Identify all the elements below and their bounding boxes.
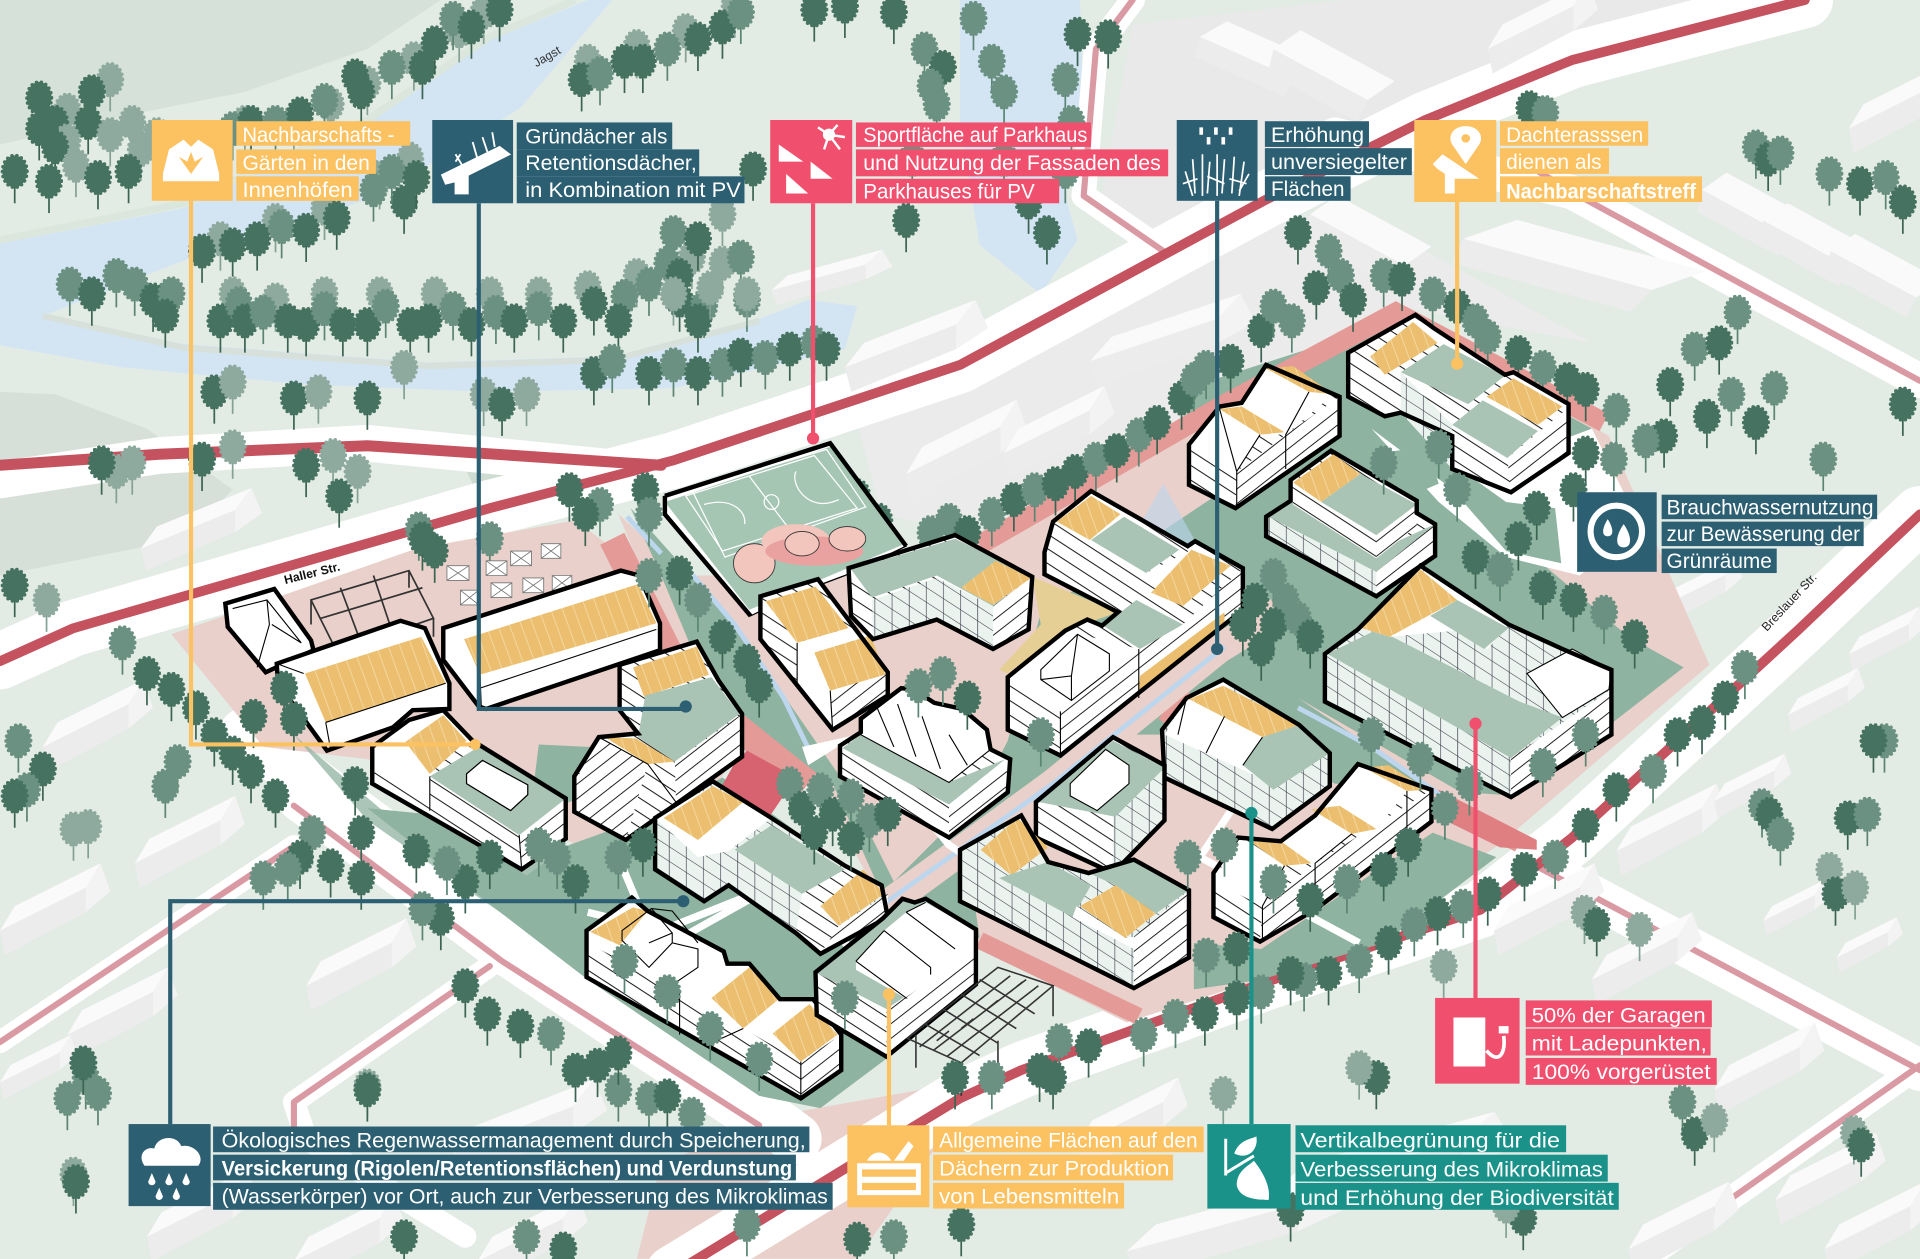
icon: charging station bbox=[1453, 1018, 1485, 1067]
callout: Sportflaeche bbox=[770, 120, 1168, 203]
icon: neighbours around plant bbox=[163, 140, 219, 181]
building: gabled L block bbox=[574, 642, 742, 840]
callout: Dachterrassen: Nachbarschaftstreff bbox=[1506, 179, 1697, 203]
callout: Vertikalbegruenung: Vertikalbegrünung für die bbox=[1300, 1128, 1560, 1152]
building: triple gables bbox=[1213, 764, 1431, 942]
river Jagst bbox=[0, 0, 1082, 392]
callout: Garagen Ladepunkte: 50% der Garagen bbox=[1532, 1003, 1706, 1027]
callout: Lebensmittelproduktion: Dächern zur Produktion bbox=[939, 1156, 1169, 1180]
pergola west bbox=[311, 571, 433, 667]
callout: Regenwassermanagement: Versickerung (Rigolen/Retentionsflächen) und Verdunstung bbox=[222, 1156, 792, 1180]
building: NE twin gable bbox=[1189, 365, 1340, 508]
icon: water circle bbox=[1591, 506, 1642, 557]
building: long solar hall centre bbox=[443, 571, 660, 709]
callout: Regenwassermanagement: Ökologisches Regenwassermanagement durch Speicherung, bbox=[222, 1128, 806, 1152]
building: square green roof bbox=[1036, 737, 1164, 873]
building: south terrace bbox=[655, 781, 888, 954]
icon: rain cloud bbox=[142, 1138, 201, 1166]
building: solar block west bbox=[760, 579, 888, 730]
trees behind project bbox=[2, 0, 1915, 632]
callout: Dachterrassen bbox=[1414, 120, 1702, 203]
icon: green roof bbox=[442, 132, 509, 193]
callout: Erhoehung unversiegelter Flaechen: Flächen bbox=[1271, 177, 1344, 201]
building: stepped roof block bbox=[840, 688, 1010, 838]
callout: Vertikalbegruenung: Verbesserung des Mikroklimas bbox=[1300, 1158, 1603, 1182]
site ground bbox=[171, 312, 1709, 1108]
building: south block glass bbox=[960, 815, 1189, 988]
callout: Regenwassermanagement bbox=[129, 1124, 833, 1210]
callout: Lebensmittelproduktion: Allgemeine Flächen auf den bbox=[939, 1128, 1198, 1152]
label: Breslauer Str: Breslauer Str. bbox=[1759, 570, 1820, 634]
trees in project bbox=[2, 431, 1897, 1259]
label: Haller Str: Haller Str. bbox=[283, 560, 341, 587]
callout: Nachbarschaftsgaerten bbox=[152, 120, 410, 202]
callout: Erhoehung unversiegelter Flaechen: unversiegelter bbox=[1271, 150, 1407, 174]
callout: Brauchwasser: Brauchwassernutzung bbox=[1667, 495, 1873, 519]
callout: Lebensmittelproduktion: von Lebensmitteln bbox=[939, 1185, 1119, 1209]
callout: Sportflaeche: Sportfläche auf Parkhaus bbox=[863, 123, 1087, 147]
callout: Erhoehung unversiegelter Flaechen bbox=[1177, 120, 1412, 201]
callout: Lebensmittelproduktion bbox=[847, 1125, 1204, 1209]
callout: Sportflaeche: und Nutzung der Fassaden des bbox=[863, 151, 1161, 175]
building: NE terrace block bbox=[1348, 315, 1569, 492]
building: NE central block bbox=[1266, 451, 1435, 596]
building: south gabled row bbox=[587, 898, 841, 1098]
callout: Nachbarschaftsgaerten: Nachbarschafts - bbox=[242, 123, 394, 147]
icon: vegetable crate bbox=[857, 1163, 921, 1195]
callout: Gruendaecher bbox=[432, 120, 744, 203]
label: Jagst: Jagst bbox=[531, 43, 564, 70]
basketball court bbox=[686, 449, 866, 557]
callout: Dachterrassen: Dachterasssen bbox=[1506, 123, 1643, 147]
building: sports hall parking deck bbox=[665, 443, 906, 616]
callout: Nachbarschaftsgaerten: Innenhöfen bbox=[242, 178, 353, 202]
callout: Garagen Ladepunkte: mit Ladepunkten, bbox=[1532, 1032, 1707, 1056]
callout: Gruendaecher: Retentionsdächer, bbox=[525, 151, 697, 175]
building: west block with rooftop box bbox=[372, 710, 566, 869]
callout: Regenwassermanagement: (Wasserkörper) vor Ort, auch zur Verbesserung des Mikroklimas bbox=[222, 1185, 828, 1209]
callout: Vertikalbegruenung bbox=[1207, 1124, 1619, 1210]
callout: Erhoehung unversiegelter Flaechen: Erhöhung bbox=[1271, 123, 1364, 147]
building: L block with glass facade bbox=[849, 535, 1032, 649]
callout: Gruendaecher: in Kombination mit PV bbox=[525, 178, 742, 202]
icon: rain on grass bbox=[1201, 127, 1231, 144]
icon: pin over roof bbox=[1450, 126, 1481, 164]
building: east courtyard block bbox=[1325, 566, 1611, 797]
icon: leaves bbox=[1226, 1139, 1254, 1175]
building: solar gable with glass base bbox=[1162, 680, 1330, 829]
leader lines bbox=[170, 201, 1482, 1125]
pergola south bbox=[907, 967, 1053, 1096]
icon: sun and PV panels bbox=[779, 144, 833, 193]
building: central multi-part block bbox=[1008, 491, 1243, 755]
pink play blobs bbox=[733, 524, 866, 583]
callout: Gruendaecher: Gründächer als bbox=[525, 124, 667, 148]
callout: Brauchwasser: zur Bewässerung der bbox=[1667, 522, 1860, 546]
building: gabled corner bbox=[225, 589, 313, 672]
callout: Nachbarschaftsgaerten: Gärten in den bbox=[242, 151, 370, 175]
callout: Brauchwasser: Grünräume bbox=[1667, 549, 1772, 573]
callout: Garagen Ladepunkte: 100% vorgerüstet bbox=[1532, 1060, 1711, 1084]
callout: Dachterrassen: dienen als bbox=[1506, 150, 1602, 174]
market umbrellas bbox=[447, 544, 572, 605]
building: south gable block bbox=[816, 899, 976, 1057]
callout: Vertikalbegruenung: und Erhöhung der Biodiversität bbox=[1300, 1186, 1614, 1210]
callout: Garagen Ladepunkte bbox=[1435, 998, 1717, 1085]
callout: Brauchwasser bbox=[1577, 492, 1877, 573]
building: long solar hall west bbox=[277, 621, 449, 751]
pink paths bbox=[612, 312, 1604, 1016]
callout: Sportflaeche: Parkhauses für PV bbox=[863, 179, 1035, 203]
